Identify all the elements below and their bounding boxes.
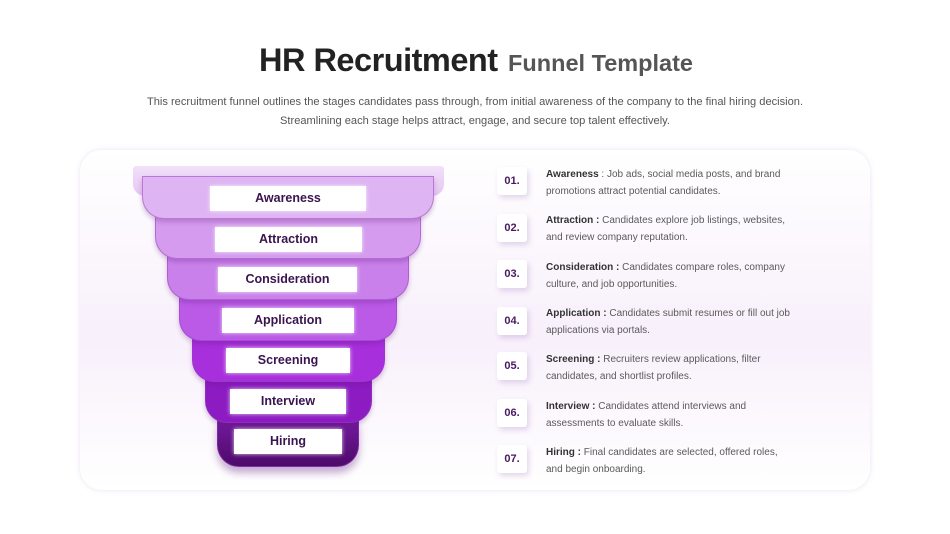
label: Application	[222, 308, 354, 333]
label: Screening	[226, 348, 350, 373]
step list: Interview : Candidates attend interviews and assessments to evaluate skills.	[546, 401, 746, 429]
step list: 03.	[504, 268, 520, 280]
label: Application: Application	[254, 313, 322, 327]
label: Interview	[230, 389, 346, 414]
subtitle: Streamlining each stage helps attract, engage, and secure top talent effectively.	[280, 115, 670, 127]
step list: 04.	[504, 315, 520, 327]
step list: 05.	[504, 360, 520, 372]
label: Hiring	[234, 429, 342, 454]
step list: Consideration : Candidates compare roles, company culture, and job opportunities.	[546, 262, 785, 290]
step list: Awareness : Job ads, social media posts, and brand promotions attract potential candidates.	[546, 169, 780, 197]
step list: Attraction : Candidates explore job listings, websites, and review company reputation.	[546, 215, 785, 243]
title: HR Recruitment Funnel Template	[259, 42, 693, 78]
subtitle: This recruitment funnel outlines the stages candidates pass through, from initial awareness of the company to the final hiring decision.	[147, 96, 803, 108]
label: Consideration: Consideration	[245, 272, 330, 286]
label: Attraction: Attraction	[259, 232, 318, 246]
label: Screening: Screening	[258, 353, 318, 367]
step list: 07.	[504, 453, 520, 465]
panel: main card	[80, 150, 870, 490]
label: Consideration	[218, 267, 357, 292]
step list: Application : Candidates submit resumes or fill out job applications via portals.	[546, 308, 790, 336]
label: Interview: Interview	[261, 394, 315, 408]
step list: Hiring : Final candidates are selected, offered roles, and begin onboarding.	[546, 447, 778, 475]
step list: Screening : Recruiters review applications, filter candidates, and shortlist profiles.	[546, 354, 761, 382]
step list	[496, 169, 790, 478]
label: Awareness	[210, 186, 366, 211]
subtitle	[147, 96, 803, 127]
funnel rim	[133, 166, 444, 196]
step list: 01.	[504, 175, 520, 187]
step list: 06.	[504, 407, 520, 419]
label: Awareness: Awareness	[255, 191, 321, 205]
step list: 02.	[504, 222, 520, 234]
label: Attraction	[215, 227, 362, 252]
label: Hiring: Hiring	[270, 434, 306, 448]
